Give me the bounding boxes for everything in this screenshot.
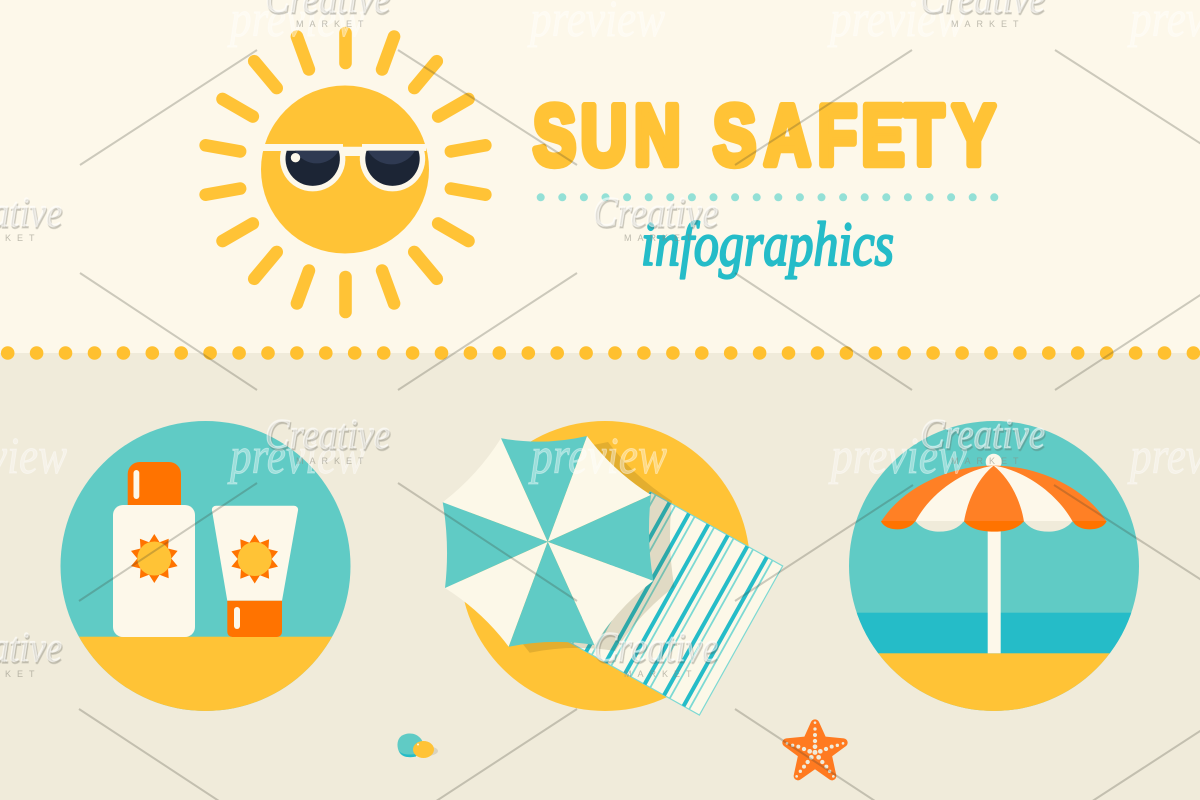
sun icon with sunglasses	[206, 33, 485, 312]
right lens	[365, 151, 420, 186]
tube sun label	[231, 534, 278, 584]
sunscreen bottle	[113, 462, 195, 637]
watermark: Creative Market shadow text: Creative	[594, 192, 719, 238]
watermark: preview wordmarks: preview	[828, 428, 967, 485]
glasses bar	[263, 144, 426, 156]
yellow dotted band	[1, 346, 1200, 360]
lens highlights	[295, 151, 338, 163]
shell shadow	[414, 746, 438, 756]
sand	[78, 636, 332, 711]
sea	[849, 613, 1139, 654]
sun disc	[261, 86, 429, 254]
watermark: Creative Market white text: Creative	[593, 625, 718, 671]
watermark: MARKET labels: MARKET	[624, 233, 698, 243]
watermark: MARKET labels: MARKET	[296, 456, 370, 466]
watermark: Creative Market shadow text: Creative	[594, 627, 719, 673]
watermark: preview wordmarks	[0, 0, 1200, 485]
bottle sun label	[131, 534, 178, 583]
left lens	[286, 151, 340, 186]
yellow shell	[413, 741, 434, 758]
teal shell	[397, 734, 424, 757]
panel: beach umbrella and towel from above	[443, 421, 783, 715]
striped towel	[567, 492, 783, 715]
watermark: preview wordmarks: preview	[227, 428, 365, 485]
icon: seashells	[397, 734, 438, 758]
watermark: Creative Market white text: Creative	[593, 190, 718, 236]
subtitle: infographics: infographics	[641, 211, 894, 279]
background: cream header	[0, 0, 1200, 353]
watermark: preview wordmarks: preview	[528, 428, 667, 485]
canopy top	[881, 466, 1107, 522]
icon: starfish	[786, 721, 844, 778]
canopy scallops	[881, 521, 915, 529]
watermark: Creative Market white text	[0, 0, 1045, 671]
sunscreen tube	[212, 506, 298, 637]
watermark: MARKET labels: MARKET	[951, 456, 1025, 466]
panel: beach umbrella scene	[849, 421, 1139, 711]
umbrella pole	[988, 528, 1001, 653]
bottle cap	[128, 462, 181, 505]
bottle body	[113, 505, 195, 637]
umbrella shadow	[464, 442, 674, 653]
right frame	[360, 144, 425, 191]
sand	[878, 653, 1110, 711]
teal panels	[501, 436, 587, 542]
watermark: Creative Market shadow text: Creative	[266, 414, 391, 460]
background: sand lower band	[0, 353, 1200, 800]
yellow circle	[460, 421, 750, 711]
umbrella finial	[986, 454, 1002, 470]
title: SUN SAFETY: SUN SAFETY	[533, 88, 995, 183]
watermark: MARKET labels: MARKET	[951, 19, 1025, 29]
watermark: Creative Market white text: Creative	[265, 412, 390, 458]
watermark: MARKET labels: MARKET	[624, 669, 698, 679]
sun rays	[206, 33, 485, 312]
watermark: Creative Market shadow text: Creative	[921, 414, 1046, 460]
left frame	[280, 144, 345, 191]
sky circle	[60, 421, 350, 711]
sky circle	[849, 421, 1139, 711]
umbrella canopy	[443, 436, 653, 647]
umbrella canopy	[881, 466, 1107, 532]
sunglasses	[263, 144, 426, 191]
cream panels	[443, 438, 548, 542]
tube body	[212, 506, 298, 601]
watermark: MARKET labels	[0, 19, 1025, 679]
watermark: MARKET labels: MARKET	[296, 19, 370, 29]
tube cap	[227, 601, 282, 637]
watermark: Creative Market white text: Creative	[920, 412, 1045, 458]
title dotted divider	[537, 193, 998, 201]
watermark: Creative Market shadow text	[0, 0, 1046, 673]
panel: sunscreen icon	[60, 421, 351, 712]
